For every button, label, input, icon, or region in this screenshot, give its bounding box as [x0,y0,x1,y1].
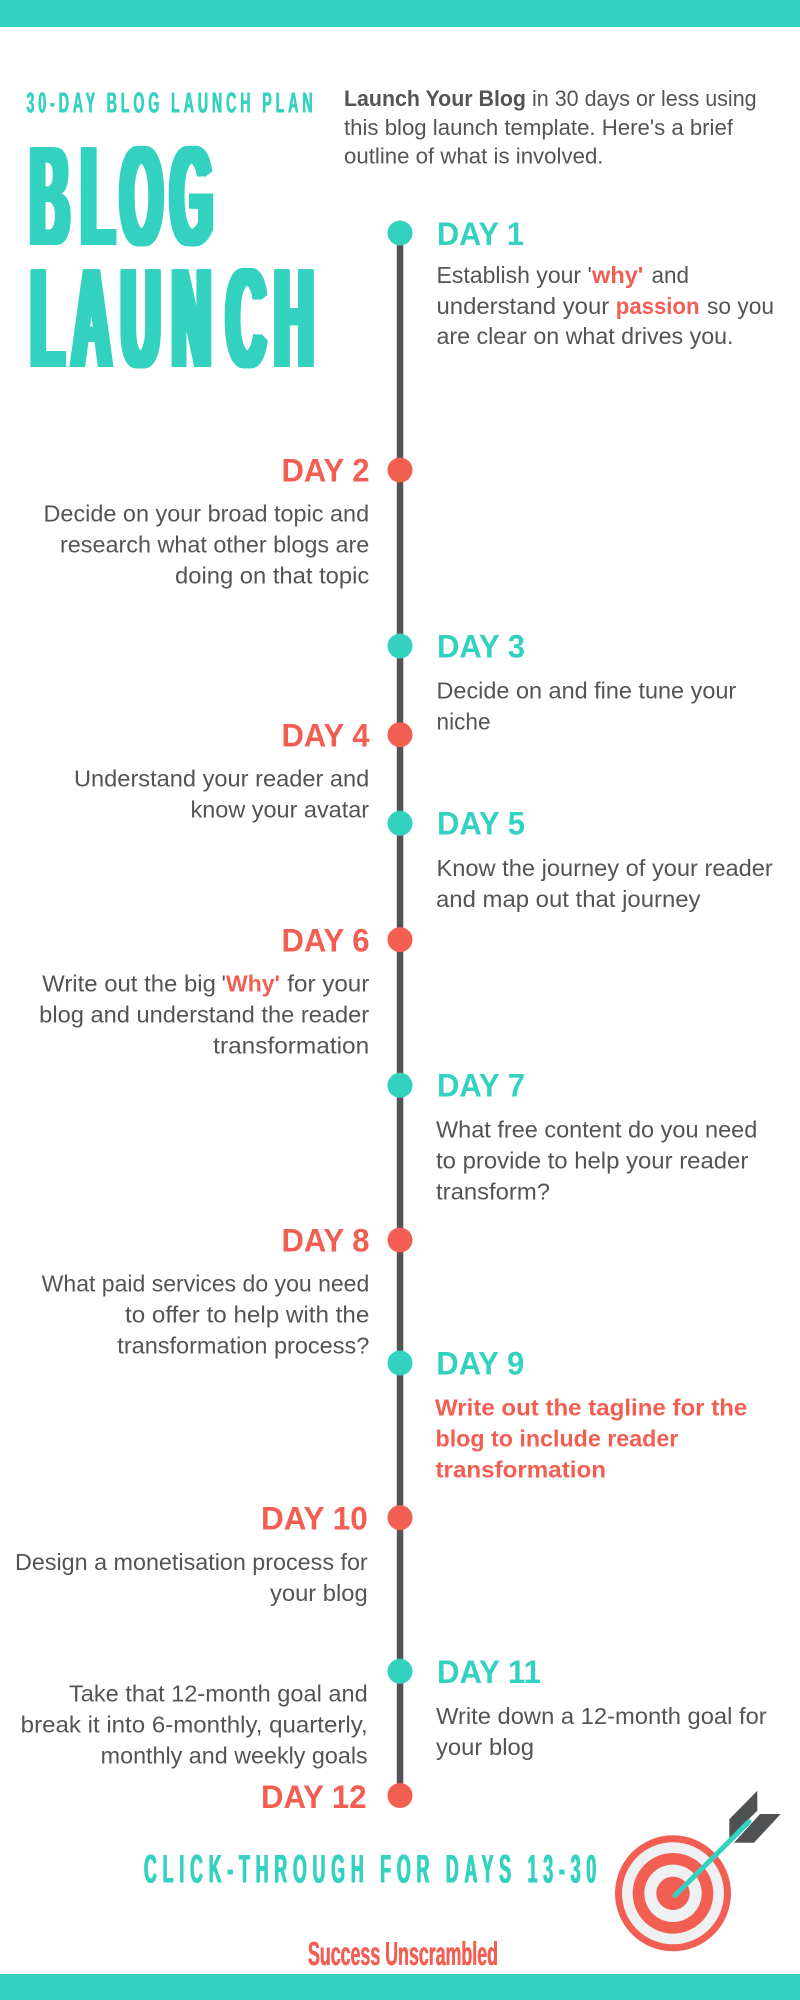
day 4 text: Understand your reader and [74,766,369,792]
day 12 text [21,1681,368,1769]
brand name: Success Unscrambled [308,1935,498,1972]
day 11 text: your blog [436,1734,534,1760]
day 1 text: and [652,262,689,288]
panel: day 11 [388,1654,767,1760]
day 3 marker [388,634,412,658]
day 7 heading: DAY 7 [437,1068,525,1104]
day 10 text: your blog [270,1580,368,1606]
icon: target with arrow [615,1791,781,1951]
day 5 text [436,855,773,912]
day 1 text: Establish your [436,262,581,288]
panel: day 5 [388,806,773,912]
day 11 heading: DAY 11 [437,1654,541,1690]
day 1 text: so you [707,293,774,319]
day 11 marker [388,1659,412,1684]
day 10 text [15,1549,368,1606]
day 9 text: Write out the tagline for the [435,1395,747,1421]
intro text block: this blog launch template. Here's a brief [344,115,734,140]
day 10 marker [388,1505,412,1530]
title: BLOG [30,117,212,275]
day 4 heading: DAY 4 [282,718,370,754]
day 11 text: Write down a 12-month goal for [436,1703,767,1729]
day 1 text: ' [588,262,592,288]
day 8 marker [388,1228,412,1252]
day 12 heading: DAY 12 [261,1779,366,1815]
bottom teal bar [0,1974,800,2000]
day 7 marker [388,1073,412,1098]
day 9 marker [388,1350,412,1376]
day 9 text [435,1395,747,1483]
top teal bar [0,0,800,27]
day 7 text [436,1117,757,1205]
day 5 text: and map out that journey [436,886,701,912]
day 12 text: break it into 6-monthly, quarterly, [21,1712,368,1738]
day 2 text: doing on that topic [175,563,369,589]
day 6 text: ' [222,971,226,997]
day 1 text: are clear on what drives you. [436,323,734,349]
panel: day 9 [388,1346,747,1483]
day 6 text: Why' [226,971,280,997]
day 5 text: Know the journey of your reader [436,855,773,881]
day 3 heading: DAY 3 [437,629,525,665]
day 7 text: What free content do you need [436,1117,757,1143]
panel: day 12 [21,1681,412,1815]
day 11 text [436,1703,767,1760]
title [30,117,313,397]
day 5 marker [388,811,412,836]
day 7 text: to provide to help your reader [436,1148,749,1174]
day 7 text: transform? [436,1179,550,1205]
infographic canvas: 30-DAY BLOG LAUNCH PLAN [26,88,316,120]
panel: day 10 [15,1501,412,1606]
day 9 heading: DAY 9 [436,1346,524,1382]
day 1 text: understand your [436,293,610,319]
intro text block: outline of what is involved. [344,144,604,168]
day 10 heading: DAY 10 [261,1501,368,1537]
day 2 heading: DAY 2 [282,452,370,488]
intro text block [344,86,757,168]
day 1 text: why' [591,262,643,288]
day 6 text: blog and understand the reader [39,1002,370,1028]
timeline vertical line [397,233,403,1795]
panel: day 7 [388,1068,757,1205]
title: LAUNCH [31,239,313,397]
day 3 text: Decide on and fine tune your [436,678,737,704]
day 2 text [44,501,369,589]
day 6 text: Write out the big [42,971,216,997]
day 1 heading: DAY 1 [437,216,524,252]
day 6 text: transformation [213,1033,369,1059]
day 1 marker [388,220,412,246]
day 8 text [42,1271,369,1359]
day 12 text: Take that 12-month goal and [69,1681,368,1707]
panel: day 3 [388,629,737,735]
intro text block: in 30 days or less using [532,86,757,111]
day 12 text: monthly and weekly goals [101,1743,368,1769]
intro text block: Launch Your Blog [344,86,526,111]
day 1 text [436,262,774,349]
day 2 marker [388,458,412,482]
day 6 text [39,971,370,1059]
panel: day 2 [44,452,412,589]
day 6 text: for your [287,971,370,997]
day 6 heading: DAY 6 [282,923,370,959]
day 8 text: transformation process? [117,1333,369,1359]
day 4 text: know your avatar [190,797,369,823]
day 1 text: passion [616,293,700,319]
day 3 text: niche [436,709,490,735]
day 8 text: to offer to help with the [125,1302,369,1328]
panel: day 6 [39,923,412,1059]
day 9 text: blog to include reader [436,1426,678,1452]
day 10 text: Design a monetisation process for [15,1549,368,1575]
day 5 heading: DAY 5 [437,806,525,842]
day 6 marker [388,927,412,952]
day 9 text: transformation [436,1457,606,1483]
day 4 marker [388,722,412,747]
day 12 marker [388,1783,412,1808]
day 3 text [436,678,737,735]
day 4 text [74,766,369,823]
day 2 text: research what other blogs are [60,532,369,558]
panel: day 8 [42,1223,412,1359]
panel: day 1 [388,216,774,349]
day 8 heading: DAY 8 [282,1223,370,1259]
day 2 text: Decide on your broad topic and [44,501,369,527]
panel: day 4 [74,718,412,823]
day 8 text: What paid services do you need [42,1271,369,1297]
